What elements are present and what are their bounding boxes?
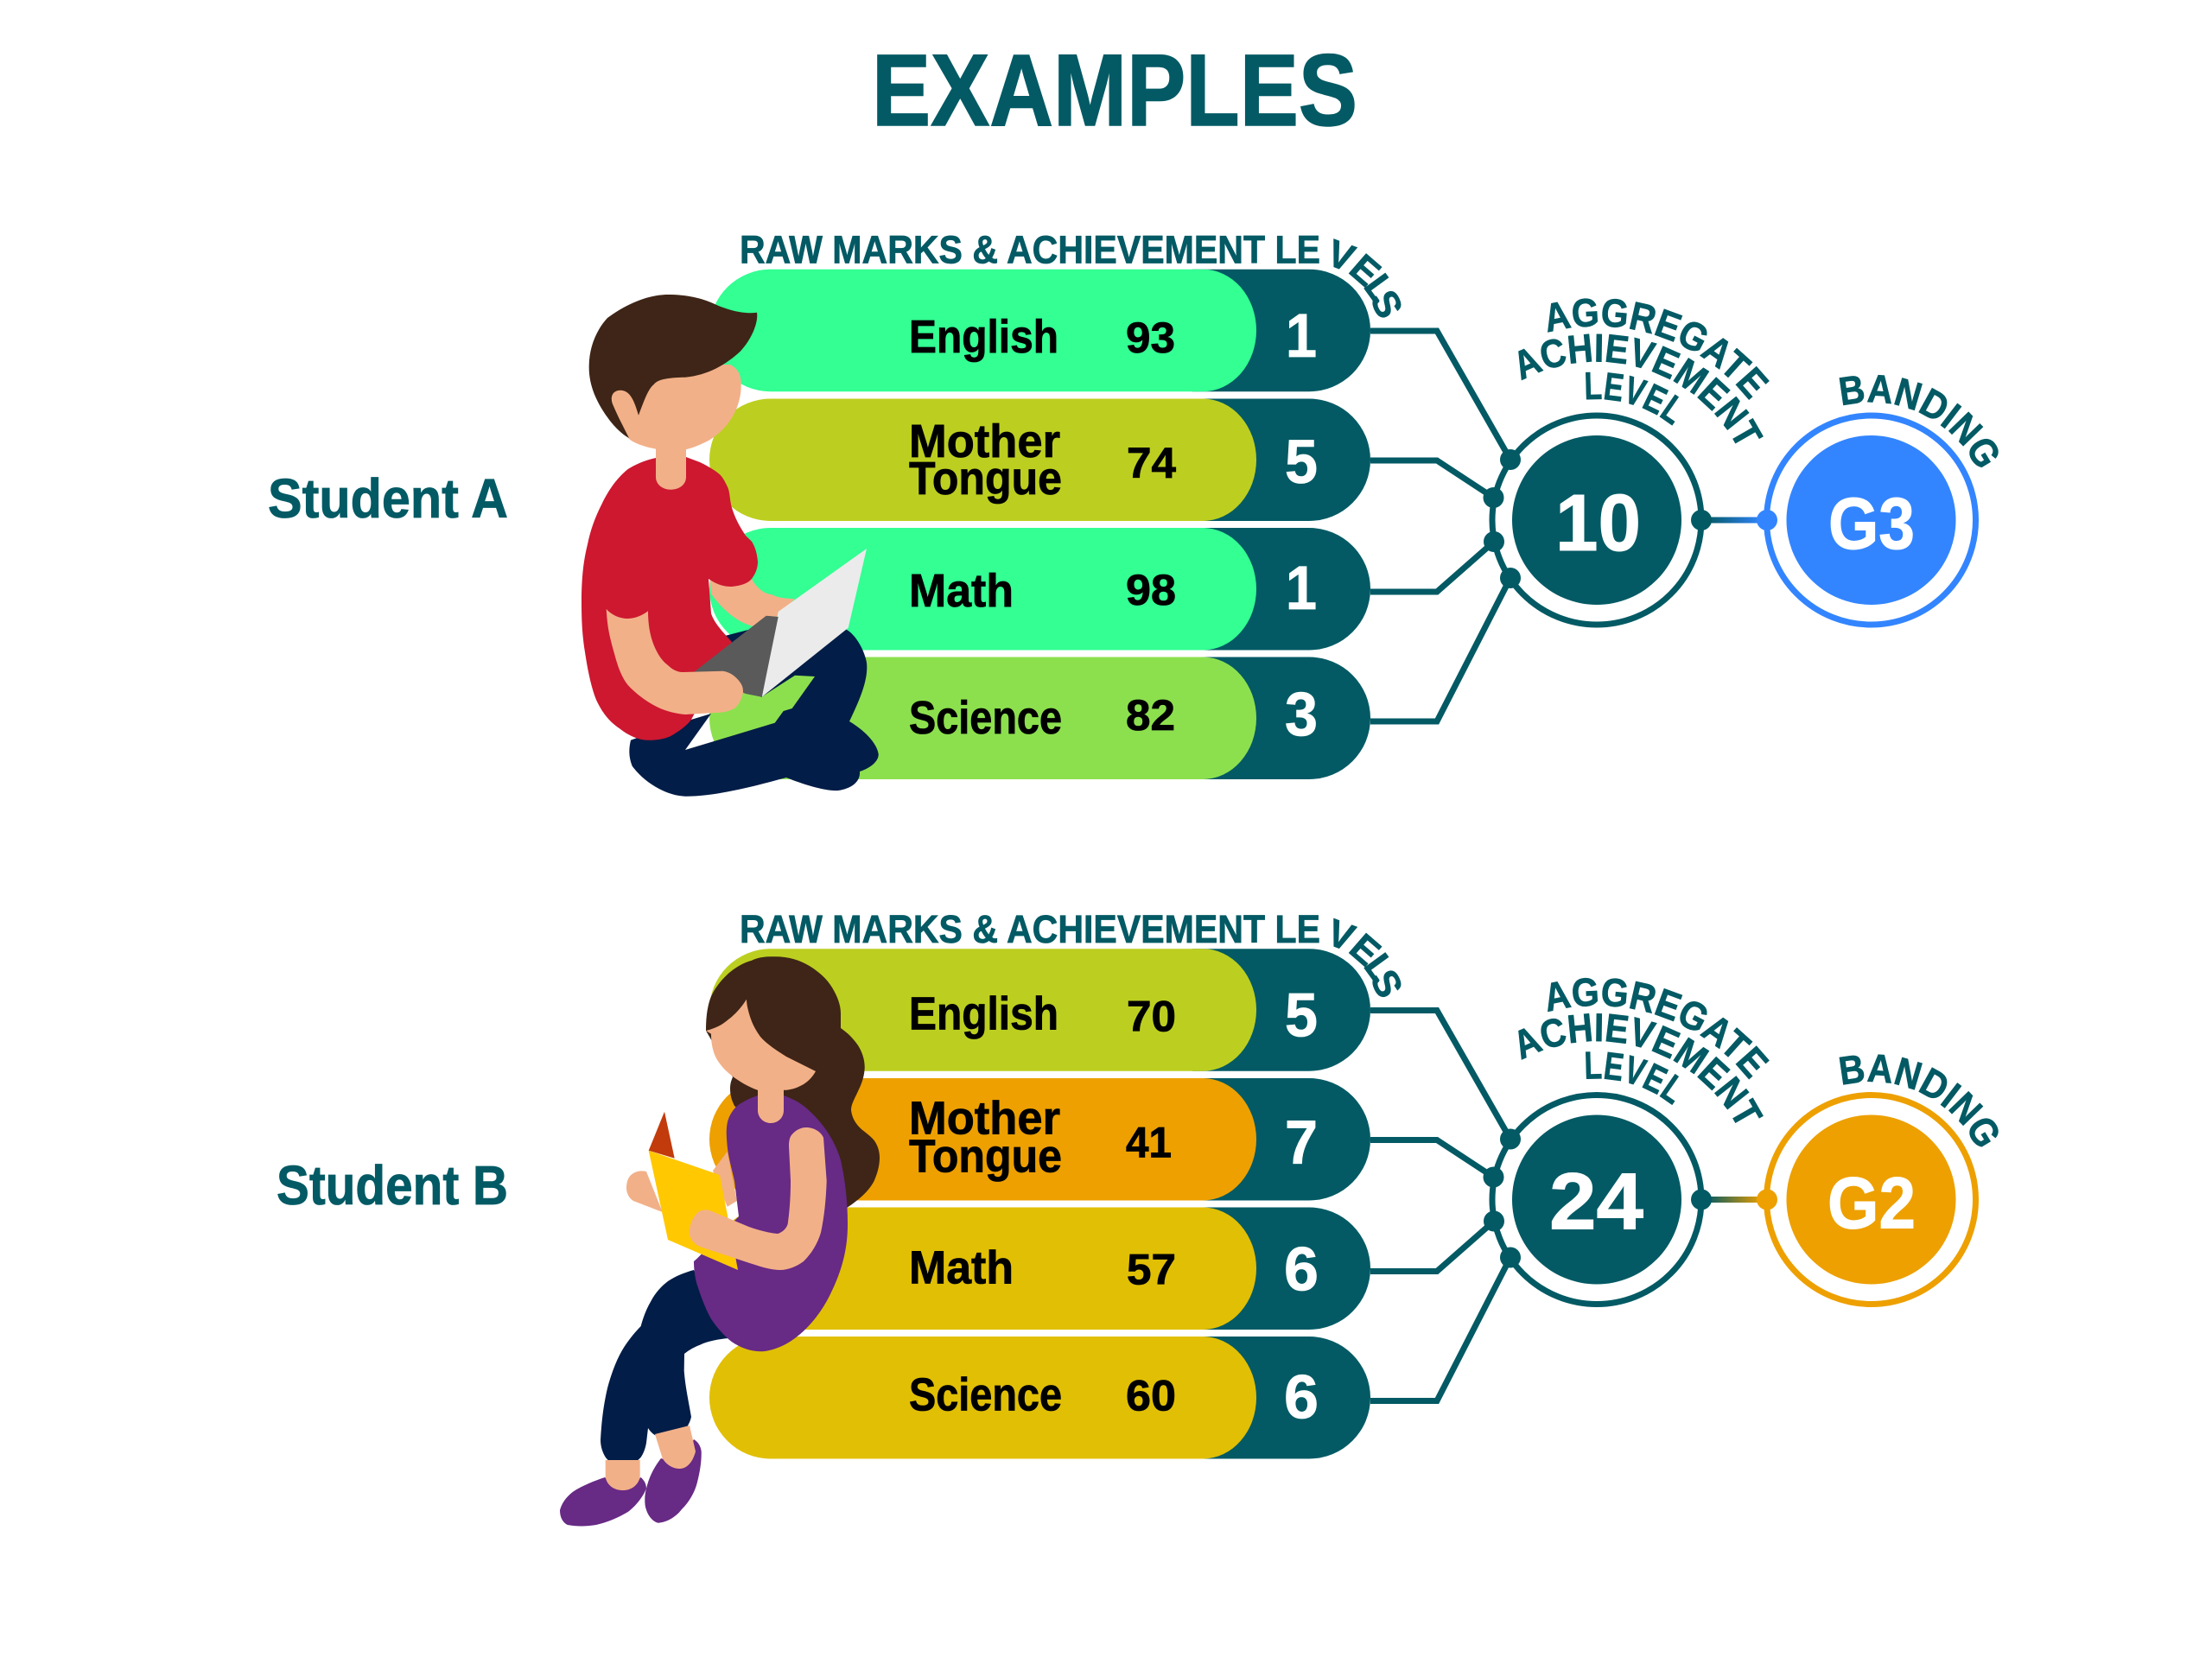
row: Mother Tongue: Tongue: [909, 1130, 1062, 1182]
raw marks heading: VELS: [1322, 911, 1411, 1004]
aggregate level circle: 24: [1549, 1156, 1643, 1246]
connector lines to aggregate: [1370, 1011, 1510, 1401]
row: Math: [709, 528, 1370, 650]
connector to banding: [1701, 1197, 1766, 1203]
row: Science: 82: [1126, 691, 1175, 740]
row: English: 70: [1127, 992, 1176, 1040]
row: Science: 6: [1284, 1363, 1319, 1432]
row: English: [709, 270, 1370, 391]
row: English: 5: [1285, 981, 1318, 1051]
student B label: Student B: [276, 1154, 508, 1216]
row: Mother Tongue: Tongue: [909, 453, 1062, 505]
row: English: English: [909, 988, 1058, 1040]
row: Mother Tongue: [709, 399, 1370, 521]
banding heading: BANDING: [1839, 1054, 1999, 1147]
aggregate heading: LEVEL: [1586, 371, 1679, 426]
row: Science: [709, 657, 1370, 779]
banding circle: [1691, 416, 1975, 625]
title: EXAMPLES: [872, 34, 1357, 148]
row: Mother Tongue: Mother: [909, 1092, 1060, 1144]
panel: student B: [276, 907, 1999, 1526]
raw marks heading: RAW MARKS & ACHIEVEMENT LE: [740, 228, 1320, 271]
row: English: 1: [1286, 302, 1317, 371]
banding circle: G3: [1828, 483, 1915, 564]
row: Mother Tongue: 7: [1285, 1109, 1318, 1177]
figure: girl reading: [560, 956, 880, 1526]
banding circle: G2: [1827, 1163, 1916, 1244]
student A label: Student A: [268, 467, 508, 530]
row: Mother Tongue: 5: [1285, 429, 1318, 497]
aggregate level circle: [1483, 1095, 1701, 1305]
aggregate level circle: [1483, 416, 1701, 625]
connector lines to aggregate: [1370, 331, 1510, 721]
row: English: 93: [1126, 314, 1175, 362]
row: Science: Science: [909, 1368, 1062, 1420]
row: Science: [709, 1337, 1370, 1458]
row: Math: 1: [1286, 555, 1317, 623]
aggregate heading: AGGREGATE: [1548, 298, 1770, 400]
rows and circles of student B: [709, 907, 1999, 1458]
row: English: [709, 949, 1370, 1071]
row: Math: Math: [909, 1242, 1014, 1294]
row: Math: 57: [1127, 1246, 1176, 1294]
aggregate heading: LEVEL: [1586, 1051, 1679, 1106]
row: Mother Tongue: 41: [1126, 1118, 1172, 1166]
aggregate heading: AGGREGATE: [1548, 978, 1770, 1080]
banding heading: BANDING: [1839, 375, 1999, 467]
row: Mother Tongue: 74: [1127, 439, 1176, 487]
row: Science: 3: [1285, 681, 1318, 749]
row: Science: Science: [909, 692, 1062, 744]
aggregate heading: ACHIEVEMENT: [1518, 1013, 1764, 1123]
figure: boy with laptop: [582, 295, 879, 797]
row: Math: [709, 1208, 1370, 1330]
aggregate heading: ACHIEVEMENT: [1518, 333, 1764, 444]
banding circle: [1691, 1095, 1975, 1305]
connector to banding: [1701, 517, 1766, 524]
row: Mother Tongue: Mother: [909, 416, 1060, 467]
raw marks heading: VELS: [1322, 232, 1411, 325]
row: Math: 98: [1126, 566, 1176, 614]
row: Science: 60: [1126, 1372, 1176, 1420]
raw marks heading: RAW MARKS & ACHIEVEMENT LE: [740, 907, 1320, 951]
row: Mother Tongue: [709, 1078, 1370, 1201]
row: Math: Math: [909, 565, 1014, 617]
panel: student A: [268, 228, 1999, 797]
row: English: English: [909, 311, 1058, 363]
row: Math: 6: [1284, 1235, 1319, 1305]
aggregate level circle: 10: [1555, 478, 1641, 568]
